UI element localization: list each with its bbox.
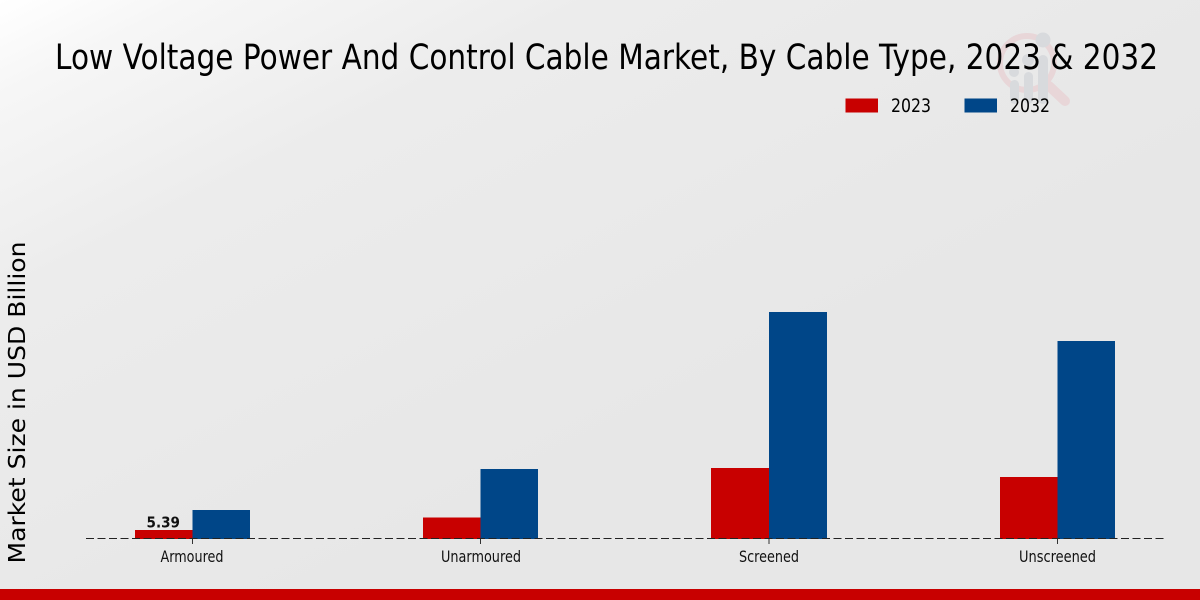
group: Unarmoured — [423, 469, 538, 539]
legend item: 2032: 2032 — [1010, 95, 1050, 117]
legend item: 2023 — [846, 95, 931, 117]
category label: Armoured: Armoured — [160, 547, 224, 566]
y axis label: Market Size in USD Billion — [4, 242, 31, 564]
legend item: 2023: 2023 — [891, 95, 931, 117]
category label: Screened: Screened — [739, 547, 799, 566]
group: Unscreened — [1000, 341, 1115, 539]
bar chart — [86, 312, 1164, 544]
category label: Unscreened: Unscreened — [1019, 547, 1096, 566]
category label: Unarmoured: Unarmoured — [441, 547, 521, 566]
footer bar — [0, 589, 1200, 600]
icon: watermark logo — [1000, 32, 1065, 104]
group: Screened — [711, 312, 827, 539]
data label: 5.39: 5.39 — [146, 514, 180, 532]
legend item: 2032 — [964, 95, 1050, 117]
group: Armoured — [135, 510, 250, 539]
legend — [846, 95, 1050, 117]
